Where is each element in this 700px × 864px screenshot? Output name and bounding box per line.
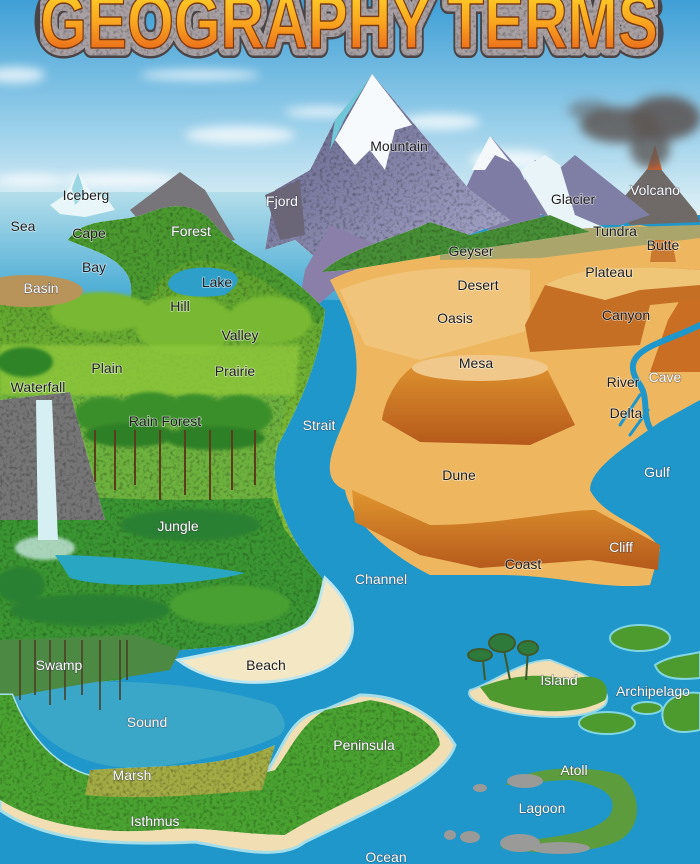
labels: Marsh <box>113 767 151 783</box>
atoll <box>444 768 637 854</box>
volcano <box>615 145 700 225</box>
labels: Geyser <box>448 243 494 259</box>
labels: Forest <box>171 223 211 239</box>
rain forest canopy <box>0 347 272 450</box>
labels: Coast <box>505 556 541 572</box>
left hill mountain <box>130 172 235 250</box>
archipelago <box>579 625 700 734</box>
plateau <box>525 267 700 352</box>
labels: Island <box>540 672 578 688</box>
hills <box>50 292 312 355</box>
palms <box>468 634 538 680</box>
labels: Tundra <box>593 223 637 239</box>
labels: Iceberg <box>63 187 109 203</box>
island <box>468 634 607 717</box>
labels: Channel <box>355 571 407 587</box>
labels: Delta <box>610 405 643 421</box>
mesa <box>382 357 575 445</box>
tundra band <box>440 225 700 260</box>
labels: Prairie <box>215 363 255 379</box>
tree trunks <box>95 430 255 500</box>
labels: Cave <box>649 369 682 385</box>
sky <box>0 0 700 215</box>
waterfall <box>0 392 105 560</box>
plain <box>0 345 300 395</box>
labels: Rain Forest <box>129 413 201 429</box>
labels: Cliff <box>609 539 633 555</box>
labels: Sound <box>127 714 167 730</box>
labels: Butte <box>647 237 680 253</box>
labels: Peninsula <box>333 737 395 753</box>
iceberg <box>50 172 115 217</box>
mountain range <box>265 74 700 325</box>
clouds <box>0 67 550 187</box>
labels: River <box>607 374 640 390</box>
labels: Lake <box>202 274 232 290</box>
beach <box>178 578 352 682</box>
river and delta <box>620 325 700 435</box>
sound <box>12 682 285 768</box>
jungle foliage <box>0 509 290 626</box>
labels: Lagoon <box>519 800 565 816</box>
labels: Cape <box>72 225 106 241</box>
basin <box>0 275 83 307</box>
peninsula and isthmus <box>0 695 455 852</box>
labels: Oasis <box>437 310 473 326</box>
labels: Plateau <box>585 264 633 280</box>
labels: Sea <box>11 218 36 234</box>
labels: Volcano <box>630 182 680 198</box>
forest <box>68 206 325 325</box>
labels: Atoll <box>560 762 588 778</box>
labels: Jungle <box>157 518 199 534</box>
small peak <box>458 136 552 240</box>
labels: Archipelago <box>616 683 690 699</box>
labels: Glacier <box>551 191 596 207</box>
forest foothills <box>322 215 590 272</box>
volcano smoke <box>568 96 700 168</box>
labels: Desert <box>457 277 499 293</box>
rain forest ground <box>0 395 290 510</box>
left land <box>0 206 335 690</box>
labels: Bay <box>82 259 106 275</box>
labels: Fjord <box>266 193 298 209</box>
labels: Mountain <box>370 138 428 154</box>
labels: Beach <box>246 657 286 673</box>
labels: Waterfall <box>11 379 65 395</box>
jungle <box>0 494 322 690</box>
labels: Mesa <box>459 355 493 371</box>
desert <box>322 215 700 586</box>
labels: Gulf <box>644 464 670 480</box>
labels: Plain <box>91 360 123 376</box>
labels: Valley <box>221 327 259 343</box>
labels: Isthmus <box>130 813 180 829</box>
labels: Hill <box>170 298 190 314</box>
butte <box>650 240 676 262</box>
inlet <box>55 555 245 585</box>
labels: Swamp <box>36 657 83 673</box>
glacier <box>515 155 650 225</box>
swamp <box>0 635 180 710</box>
main mountain <box>265 74 510 270</box>
marsh <box>85 745 275 797</box>
lake <box>168 268 238 297</box>
ocean <box>0 300 700 864</box>
cliff <box>352 490 660 570</box>
labels: Dune <box>442 467 476 483</box>
sea <box>0 192 340 322</box>
labels: Canyon <box>602 307 650 323</box>
labels: Strait <box>303 417 335 433</box>
labels: Basin <box>23 280 59 296</box>
